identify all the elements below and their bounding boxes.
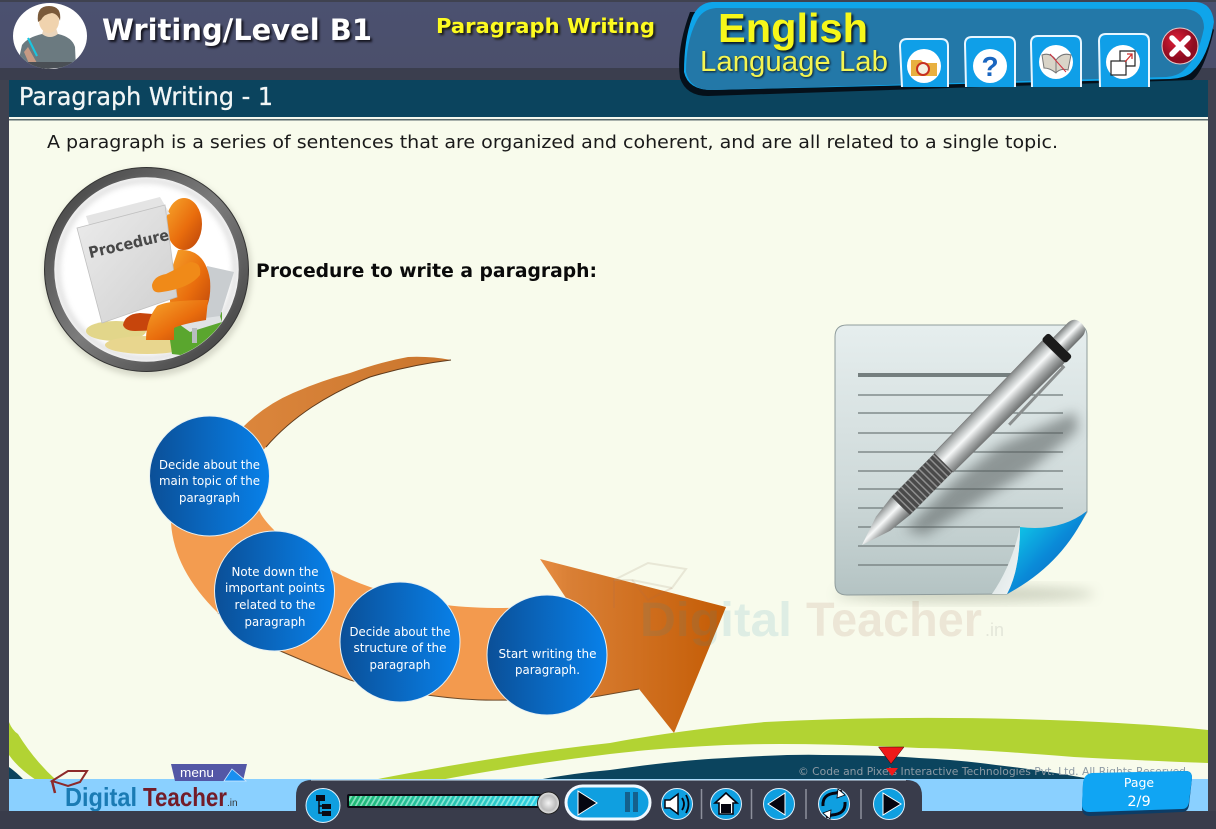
heading: Paragraph Writing: Paragraph Writing [436,14,655,38]
avatar: student writing [13,3,87,69]
brand: English: English [718,5,868,51]
reading figure: back [123,198,210,331]
step 2 circle: paragraph [244,615,306,629]
step 2 circle: related to the [234,598,316,612]
menu tab: menu [180,766,214,780]
section title bar [9,80,1208,120]
button: next [861,788,904,820]
play and pause [566,786,650,819]
watermark: Digital Teacher: Teacher [806,594,982,647]
step 1 circle: main topic of the [159,474,260,488]
step 3 circle: paragraph [370,658,430,672]
brand: Language Lab: Language Lab [700,46,888,78]
pen [850,311,1096,559]
page curl [992,511,1087,594]
procedure document [77,197,177,323]
heading: Writing/Level B1: Writing/Level B1 [102,13,372,47]
logo: Digital Teacher: Teacher [143,782,227,812]
tab: windows [1099,34,1149,87]
page counter: Page [1124,775,1154,790]
step 3 circle [340,582,460,702]
logo: Digital Teacher [52,771,238,812]
progress bar [347,792,560,814]
red page marker [878,747,904,776]
logo: Digital Teacher: Digital [65,782,137,812]
header bar [0,2,1216,80]
step 1 circle [150,416,270,536]
step 1 circle: Decide about the [159,458,260,472]
button: refresh [806,788,850,820]
step 4 circle: paragraph. [515,663,580,677]
menu tab [171,764,247,781]
step 3 circle: Decide about the [350,625,450,639]
step 2 circle: Note down the [232,565,318,579]
decorative swoosh: green and teal waves [9,718,1208,781]
step 1 circle: paragraph [179,491,240,505]
button: close [1162,28,1198,64]
panel: media controls [296,780,922,829]
step 2 circle [214,531,334,651]
button: tree menu [306,788,340,822]
paper sheet [835,325,1087,595]
procedure document: Procedure [87,226,171,262]
content panel [9,120,1208,780]
intro sentence: A paragraph is a series of sentences that are organized and coherent, and are all related to a single topic. [47,132,1058,153]
page counter [1082,771,1192,816]
tab: book [1031,36,1081,87]
button: home [702,788,742,820]
step 4 circle: Start writing the [498,647,596,661]
icon: notepad and pen [835,311,1096,602]
icon: procedure medallion [44,168,252,377]
reading figure: arm and leg [146,262,208,340]
button: back [752,788,794,820]
watermark: Digital Teacher [614,563,1004,647]
icon: curved arrow [171,357,726,733]
button: sound [662,788,692,820]
copyright: © Code and Pixels Interactive Technologies Pvt. Ltd. All Rights Reserved [798,766,1186,778]
bottom frame [0,811,1216,829]
step 3 circle: structure of the [354,641,446,655]
subheading: procedure: Procedure to write a paragraph: [256,260,597,282]
page counter: 2/9 [1127,794,1151,810]
ruled lines [858,375,1063,565]
panel: English Language Lab toolbar [679,2,1214,96]
bottom light-blue strip [9,779,1208,811]
step 2 circle: important points [225,581,325,595]
logo: Digital Teacher: .in [227,798,238,809]
tab: help: ? [981,51,999,82]
watermark: Digital Teacher: Digital [640,594,792,647]
tab: activity folder [900,39,948,87]
pen shadow [905,412,1078,535]
watermark: Digital Teacher: .in [985,620,1004,640]
tab: help [965,37,1015,87]
step 4 circle [487,595,607,715]
section title bar: Paragraph Writing - 1 [19,82,273,111]
